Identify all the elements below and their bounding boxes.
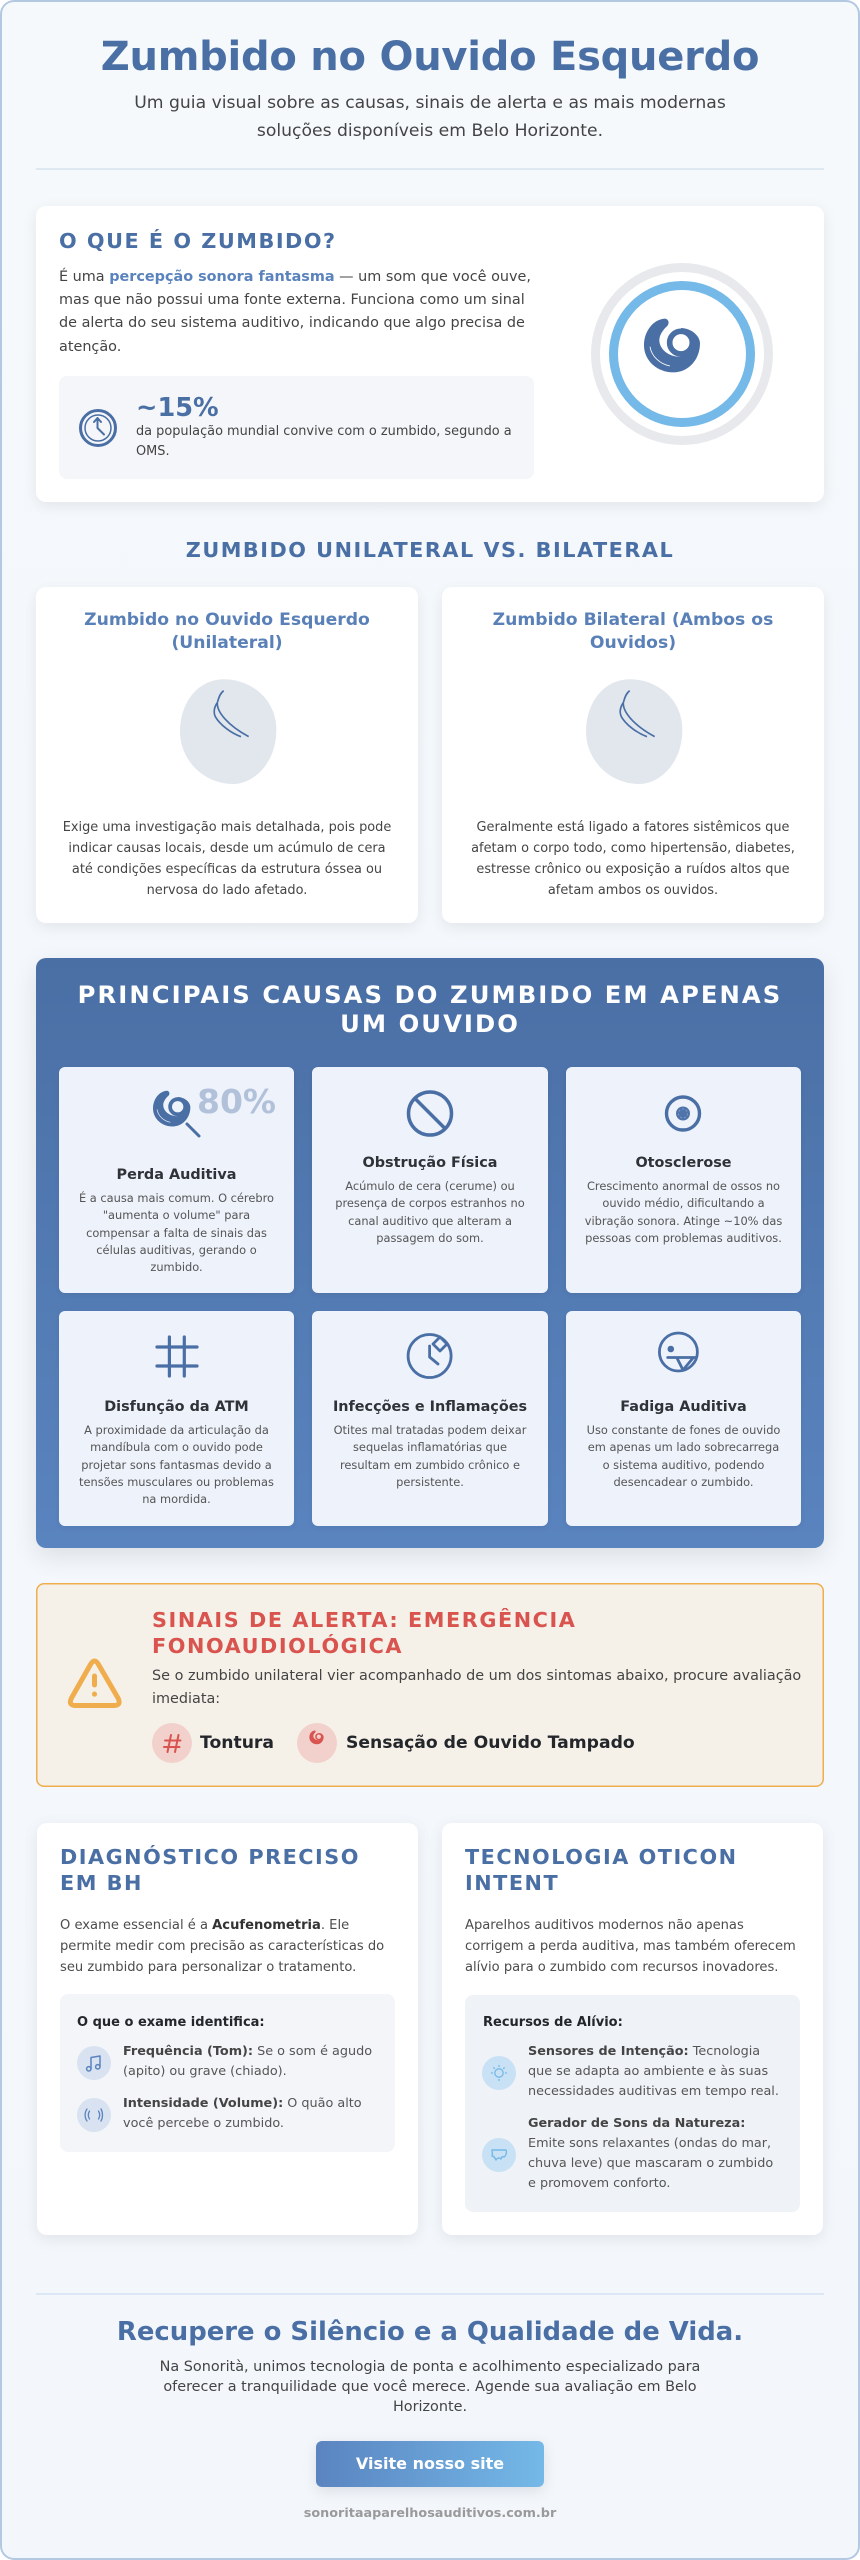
heading — [60, 1845, 360, 1895]
card text: indicar causas locais, desde um acúmulo de cera — [68, 841, 386, 856]
item: intensidade — [123, 2096, 362, 2131]
panel: o que é o zumbido — [36, 206, 824, 502]
item: sensores: que se adapta ao ambiente e às suas — [528, 2064, 768, 2079]
icon: target — [664, 1095, 702, 1132]
icon: warning triangle — [68, 1658, 122, 1708]
card text — [79, 1423, 274, 1506]
text block: atenção. — [59, 339, 121, 355]
cause card: otosclerose — [566, 1067, 801, 1293]
card text: sequelas inflamatórias que — [353, 1440, 507, 1454]
card title: Otosclerose — [635, 1155, 732, 1171]
card text: presença de corpos estranhos no — [335, 1196, 525, 1210]
heading: O QUE É O ZUMBIDO? — [59, 229, 337, 253]
card text: Acúmulo de cera (cerume) ou — [345, 1179, 515, 1193]
label: Tontura — [200, 1733, 274, 1753]
card title — [493, 610, 773, 653]
icon: sensor — [482, 2056, 516, 2090]
icon: clock — [79, 409, 117, 447]
text block: permite medir com precisão as características do — [60, 1939, 384, 1954]
text block — [465, 1918, 796, 1975]
card text: na mordida. — [142, 1492, 211, 1506]
cause card: obstrução — [312, 1067, 548, 1293]
card text: zumbido. — [150, 1260, 203, 1274]
item: sensores — [528, 2042, 779, 2102]
heading: DIAGNÓSTICO PRECISO — [60, 1845, 360, 1869]
website url: sonoritaaparelhosauditivos.com.br — [304, 2506, 556, 2521]
card text: É a causa mais comum. O cérebro — [79, 1191, 274, 1205]
card text: desencadear o zumbido. — [613, 1475, 754, 1489]
box: o que o exame identifica — [60, 1994, 395, 2152]
icon: nature sound — [482, 2138, 516, 2172]
card text — [587, 1423, 780, 1489]
panel: diagnóstico — [37, 1823, 418, 2235]
card text — [79, 1191, 274, 1274]
card text: o sistema auditivo, podendo — [603, 1458, 764, 1472]
stat: 80%: 80% — [197, 1082, 276, 1121]
heading: Recupere o Silêncio e a Qualidade de Vida. — [117, 2317, 743, 2347]
card text: A proximidade da articulação da — [84, 1423, 269, 1437]
stat caption — [136, 424, 512, 459]
item: frequência — [123, 2044, 372, 2079]
text block — [60, 1918, 384, 1975]
card text: células auditivas, gerando o — [96, 1243, 257, 1257]
item: sensores: Sensores de Intenção: Tecnologia — [528, 2044, 760, 2059]
text block: seu zumbido para personalizar o tratamento. — [60, 1960, 356, 1975]
subtitle: Um guia visual sobre as causas, sinais de alerta e as mais modernas — [134, 93, 726, 113]
stat box: 15% — [59, 376, 534, 479]
panel: unilateral — [36, 587, 418, 923]
text block: corrigem a perda auditiva, mas também oferecem — [465, 1939, 796, 1954]
heading: SINAIS DE ALERTA: EMERGÊNCIA — [152, 1608, 576, 1632]
text block: oferecer a tranquilidade que você merece. Agende sua avaliação em Belo — [163, 2379, 697, 2395]
card text — [334, 1423, 526, 1489]
cause card: fadiga — [566, 1311, 801, 1526]
card text: Uso constante de fones de ouvido — [587, 1423, 780, 1437]
card title: (Unilateral) — [171, 633, 283, 653]
card text: ouvido médio, dificultando a — [602, 1196, 765, 1210]
icon: blocked circle — [406, 1090, 454, 1137]
box title: Recursos de Alívio: — [483, 2015, 623, 2030]
stat caption: OMS. — [136, 444, 170, 459]
panel: sinais de alerta — [36, 1583, 824, 1787]
heading: INTENT — [465, 1871, 559, 1895]
section heading: unilateral vs bilateral: ZUMBIDO UNILATERAL VS. BILATERAL — [186, 538, 674, 562]
heading — [78, 980, 782, 1038]
card text: em apenas um lado sobrecarrega — [588, 1440, 779, 1454]
panel: bilateral — [442, 587, 824, 923]
card text: estresse crônico ou exposição a ruídos altos que — [476, 862, 790, 877]
stat caption: da população mundial convive com o zumbido, segundo a — [136, 424, 512, 439]
icon: hash — [152, 1723, 192, 1763]
header — [101, 34, 759, 141]
icon: ear — [297, 1723, 337, 1763]
card title — [84, 610, 370, 653]
card text: tensões musculares ou problemas — [79, 1475, 274, 1489]
card text: pessoas com problemas auditivos. — [585, 1231, 782, 1245]
title: Zumbido no Ouvido Esquerdo — [101, 34, 759, 80]
card text: afetam ambos os ouvidos. — [548, 883, 718, 898]
heading: UM OUVIDO — [340, 1009, 520, 1038]
item: intensidade: você percebe o zumbido. — [123, 2116, 284, 2131]
card title: Ouvidos) — [590, 633, 676, 653]
cause card: infecções — [312, 1311, 548, 1526]
text block: Horizonte. — [393, 2399, 467, 2415]
panel: tecnologia — [442, 1823, 823, 2235]
icon: signal — [77, 2098, 111, 2132]
card text: nervosa do lado afetado. — [147, 883, 307, 898]
card title: Zumbido no Ouvido Esquerdo — [84, 610, 370, 630]
card text: Exige uma investigação mais detalhada, pois pode — [63, 820, 391, 835]
footer call to action — [0, 2300, 860, 2530]
card text: "aumenta o volume" para — [103, 1208, 250, 1222]
card title: Obstrução Física — [363, 1155, 497, 1171]
icon: clock with diamond — [406, 1333, 452, 1379]
symptom: tontura — [152, 1723, 274, 1763]
icon: ear with magnifier — [153, 1090, 201, 1138]
icon: face with headset — [658, 1332, 699, 1372]
text block: imediata: — [152, 1691, 220, 1707]
text block: É uma percepção sonora fantasma — um som que você ouve, — [59, 269, 531, 285]
text block: de alerta do seu sistema auditivo, indicando que algo precisa de — [59, 315, 525, 331]
card text: vibração sonora. Atinge ~10% das — [585, 1214, 782, 1228]
card text: resultam em zumbido crônico e — [340, 1458, 520, 1472]
button: Visite nosso site — [356, 2454, 504, 2473]
heading — [152, 1608, 576, 1658]
card text: projetar sons fantasmas devido a — [81, 1458, 272, 1472]
card title: Zumbido Bilateral (Ambos os — [493, 610, 773, 630]
item: gerador: Emite sons relaxantes (ondas do mar, — [528, 2136, 771, 2151]
card text: Otites mal tratadas podem deixar — [334, 1423, 526, 1437]
subtitle: soluções disponíveis em Belo Horizonte. — [257, 121, 603, 141]
card title: Disfunção da ATM — [104, 1399, 249, 1415]
box title: O que o exame identifica: — [77, 2015, 265, 2030]
icon: music note — [77, 2046, 111, 2080]
item: frequência: (apito) ou grave (chiado). — [123, 2064, 287, 2079]
card title: Infecções e Inflamações — [333, 1399, 527, 1415]
card text: Crescimento anormal de ossos no — [587, 1179, 780, 1193]
item: sensores: necessidades auditivas em tempo real. — [528, 2084, 779, 2099]
heading: PRINCIPAIS CAUSAS DO ZUMBIDO EM APENAS — [78, 980, 782, 1009]
icon: ear — [586, 679, 682, 784]
heading: TECNOLOGIA OTICON — [465, 1845, 738, 1869]
cause card: ATM — [59, 1311, 294, 1526]
card title: Perda Auditiva — [117, 1167, 236, 1183]
heading: FONOAUDIOLÓGICA — [152, 1634, 403, 1658]
icon: ear in rings — [591, 263, 773, 445]
cause card: perda auditiva — [59, 1067, 294, 1293]
item: gerador: chuva leve) que mascaram o zumbido — [528, 2156, 773, 2171]
text block: O exame essencial é a Acufenometria. Ele — [60, 1918, 349, 1933]
card text: passagem do som. — [376, 1231, 484, 1245]
box: recursos de alívio — [465, 1995, 800, 2212]
card text: afetam o corpo todo, como hipertensão, diabetes, — [471, 841, 795, 856]
card text — [63, 820, 391, 898]
stat number: ~15% — [136, 393, 219, 423]
subtitle — [134, 93, 726, 141]
card text — [335, 1179, 525, 1245]
heading — [465, 1845, 738, 1895]
text block — [152, 1668, 801, 1707]
item: gerador: Gerador de Sons da Natureza: — [528, 2116, 745, 2131]
card text: persistente. — [396, 1475, 464, 1489]
heading: EM BH — [60, 1871, 143, 1895]
panel: principais causas — [36, 958, 824, 1548]
item: gerador — [528, 2114, 773, 2194]
text block: Se o zumbido unilateral vier acompanhado de um dos sintomas abaixo, procure avaliação — [152, 1668, 801, 1684]
text block: Na Sonorità, unimos tecnologia de ponta e acolhimento especializado para — [160, 2359, 700, 2375]
label: Sensação de Ouvido Tampado — [346, 1733, 635, 1753]
text block — [59, 268, 531, 355]
card text — [585, 1179, 782, 1245]
icon: grid — [155, 1335, 199, 1378]
text block: mas que não possui uma fonte externa. Funciona como um sinal — [59, 292, 525, 308]
card text: mandíbula com o ouvido pode — [90, 1440, 263, 1454]
button — [316, 2441, 544, 2487]
item: gerador: e promovem conforto. — [528, 2176, 670, 2191]
text block: alívio para o zumbido com recursos inovadores. — [465, 1960, 778, 1975]
text block — [0, 2357, 860, 2417]
card text: canal auditivo que alteram a — [348, 1214, 512, 1228]
text block: Aparelhos auditivos modernos não apenas — [465, 1918, 744, 1933]
card title: Fadiga Auditiva — [620, 1399, 747, 1415]
card text — [471, 820, 795, 898]
item: frequência: Frequência (Tom): Se o som é agudo — [123, 2044, 372, 2059]
card text: compensar a falta de sinais das — [86, 1226, 267, 1240]
card text: Geralmente está ligado a fatores sistêmicos que — [477, 820, 789, 835]
symptom: ouvido tampado — [297, 1723, 635, 1763]
item: intensidade: Intensidade (Volume): O quão alto — [123, 2096, 362, 2111]
card text: até condições específicas da estrutura óssea ou — [72, 862, 382, 877]
icon: ear — [180, 679, 276, 784]
